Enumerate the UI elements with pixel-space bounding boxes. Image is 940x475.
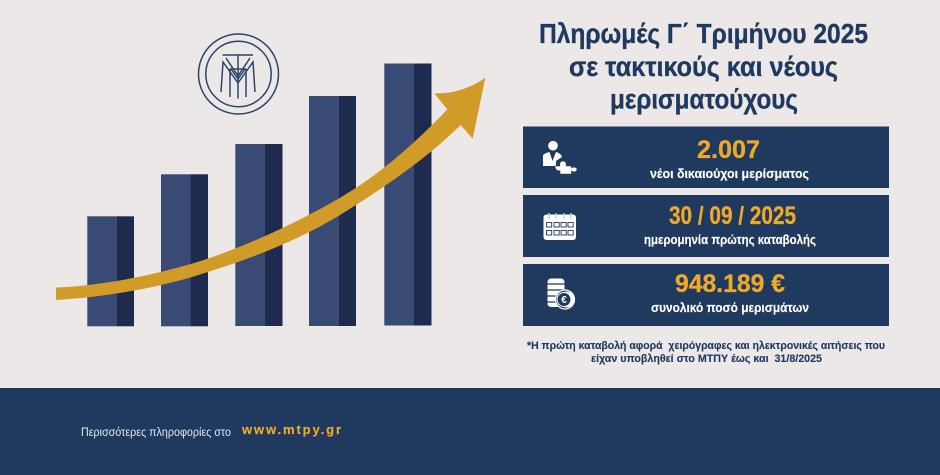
icon: coins with euro: [547, 278, 574, 309]
bar 2: [161, 174, 208, 326]
icon: person with puzzle piece: [543, 141, 577, 174]
value: 30 / 09 / 2025: [669, 202, 796, 230]
bar 5: [384, 64, 432, 326]
icon: calendar: [544, 213, 576, 240]
caption: νέοι δικαιούχοι μερίσματος: [650, 167, 809, 181]
footer text: Περισσότερες πληροφορίες στο: [81, 427, 231, 439]
footer link: www.mtpy.gr: [241, 422, 341, 437]
value: 2.007: [697, 136, 760, 164]
title: Πληρωμές Γ΄ Τριμήνου 2025: [539, 18, 868, 49]
title: σε τακτικούς και νέους: [569, 51, 838, 82]
bar chart: [87, 64, 432, 326]
caption: ημερομηνία πρώτης καταβολής: [644, 233, 816, 247]
footnote: [527, 340, 885, 365]
footer band: [0, 388, 940, 475]
caption: συνολικό ποσό μερισμάτων: [651, 301, 809, 315]
bar 1: [87, 216, 134, 326]
footnote: είχαν υποβληθεί στο ΜΤΠΥ έως και 31/8/2025: [591, 353, 822, 365]
value: 948.189 €: [675, 270, 785, 298]
logo: MTPY emblem: [198, 34, 278, 114]
footnote: *Η πρώτη καταβολή αφορά χειρόγραφες και ηλεκτρονικές αιτήσεις που: [527, 340, 885, 352]
arrow: rising trend: [56, 78, 485, 300]
panel: total amount: [523, 264, 889, 326]
title: [539, 18, 868, 114]
bar 3: [235, 144, 282, 326]
panel: first payment date: [523, 195, 889, 257]
bar 4: [309, 96, 356, 326]
title: μερισματούχους: [610, 84, 798, 114]
panel: new beneficiaries: [523, 126, 889, 188]
icon: coins with euro: €: [561, 295, 567, 306]
